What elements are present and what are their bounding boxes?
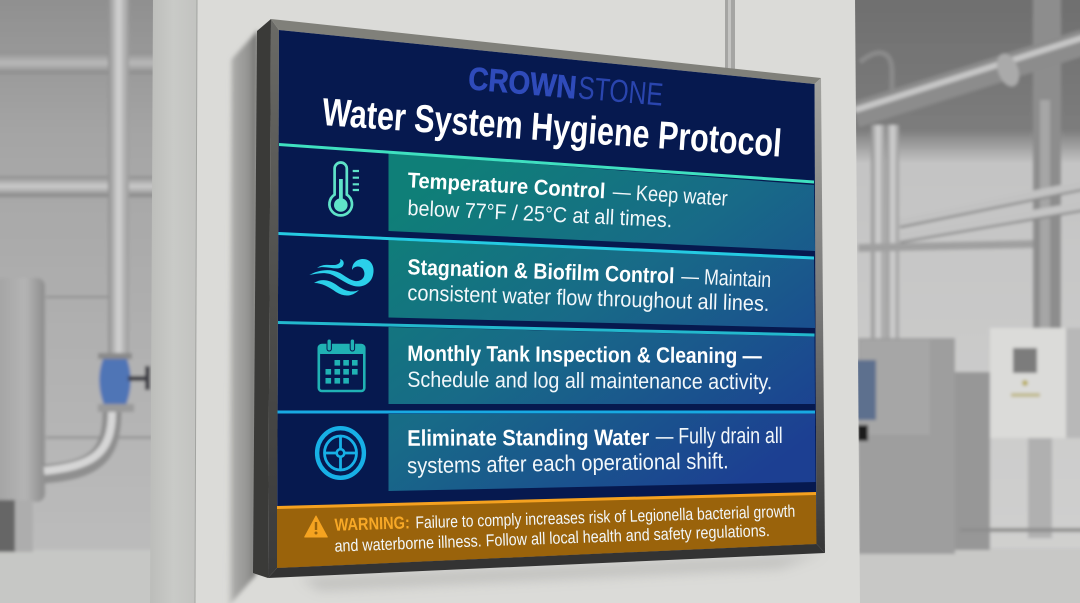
title: Water System Hygiene Protocol [321,91,783,166]
icon: thermometer [329,162,359,215]
icon: valve wheel [317,428,364,478]
row 3: monthly tank inspection [278,321,815,404]
warning text: Failure to comply increases risk of Legionella bacterial growth [415,502,796,532]
text: monthly tank inspection [407,341,772,394]
icon: warning triangle [305,516,327,537]
icon: calendar [319,339,364,391]
text: temperature control [407,168,728,232]
sign screen [277,30,816,568]
row 4: eliminate standing water [278,410,816,491]
text: stagnation and biofilm control: consistent water flow throughout all lines. [407,280,770,316]
text: stagnation and biofilm control: — Maintain [681,263,772,292]
text: eliminate standing water: Eliminate Standing Water [407,425,650,451]
row 2: stagnation and biofilm control [278,232,815,328]
concrete column [150,0,197,603]
text: temperature control: Temperature Control [407,168,606,203]
background: blurred industrial room, right side [850,0,1080,603]
background: blurred industrial room, left side [0,0,160,603]
warning text: WARNING: [334,512,410,535]
warning banner [277,492,816,568]
text: temperature control: below 77°F / 25°C at all times. [407,196,673,232]
warning text: and waterborne illness. Follow all local health and safety regulations. [334,521,770,556]
text: eliminate standing water: systems after each operational shift. [407,448,729,478]
text: eliminate standing water: — Fully drain all [656,423,783,449]
wall behind the sign [195,0,860,603]
text: stagnation and biofilm control [407,254,772,316]
row 1: temperature control [279,143,815,251]
text: monthly tank inspection: Schedule and log all maintenance activity. [407,367,772,394]
logo: CROWNSTONE: STONE [577,69,665,113]
icon: water waves [309,259,374,296]
sign frame [253,19,825,578]
text: eliminate standing water [407,423,783,478]
text: monthly tank inspection: Monthly Tank Inspection & Cleaning — [407,341,762,368]
logo: CROWNSTONE [467,60,665,113]
logo: CROWNSTONE: CROWN [467,60,578,105]
text: temperature control: — Keep water [612,180,728,211]
warning text [334,502,796,556]
text: stagnation and biofilm control: Stagnation & Biofilm Control [407,254,675,288]
